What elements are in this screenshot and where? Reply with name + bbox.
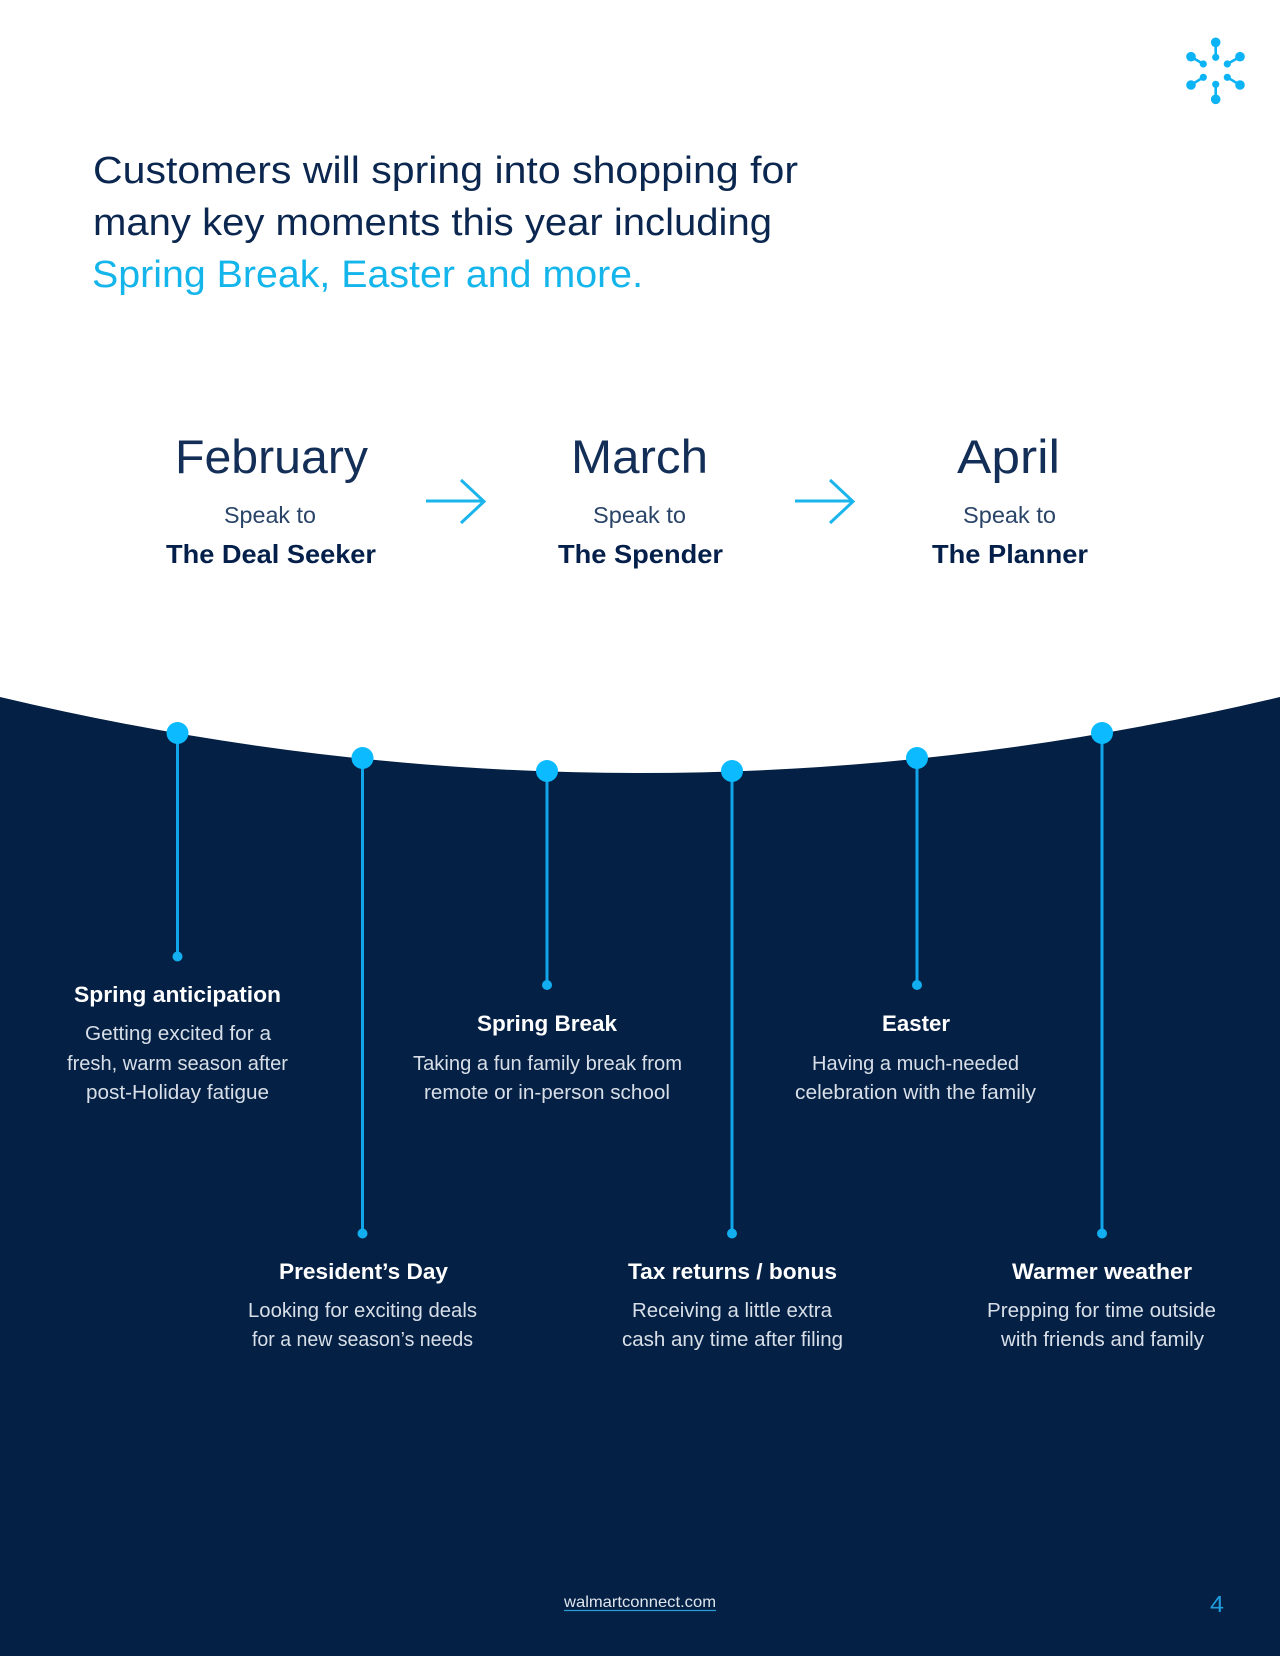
month: February: February — [175, 430, 369, 483]
timeline marker: Tax returns / bonus — [721, 760, 743, 1238]
timeline marker: Spring Break — [536, 760, 558, 990]
timeline marker: President's Day — [352, 747, 374, 1238]
text block: President's Day: President’s Day — [279, 1259, 449, 1284]
text block: Spring anticipation: post-Holiday fatigue — [86, 1082, 269, 1104]
month: March: March — [571, 430, 708, 483]
timeline marker: Warmer weather — [1091, 722, 1113, 1238]
icon: spark logo — [1186, 38, 1245, 104]
timeline marker: Spring anticipation — [166, 722, 188, 962]
arrow: February to March — [426, 480, 484, 523]
text block: Spring Break: remote or in-person school — [424, 1082, 670, 1104]
footer link: walmartconnect.com — [563, 1594, 716, 1611]
text block: Tax returns / bonus: Receiving a little extra — [632, 1300, 833, 1322]
text block: Easter: Having a much-needed — [812, 1053, 1019, 1075]
text block: President's Day: Looking for exciting deals — [248, 1300, 477, 1322]
title: many key moments this year including — [93, 202, 772, 244]
text block: Spring Break — [413, 1011, 682, 1104]
text block: Spring Break: Spring Break — [477, 1011, 618, 1036]
text block: Easter: Easter — [882, 1011, 950, 1036]
text block: Spring Break: Taking a fun family break from — [413, 1053, 682, 1075]
arrow: March to April — [795, 480, 853, 523]
title — [92, 150, 798, 296]
timeline marker: Easter — [906, 747, 928, 990]
text block: Tax returns / bonus — [622, 1259, 843, 1351]
month: April: Speak to — [963, 502, 1056, 528]
month: April: The Planner — [932, 539, 1088, 569]
panel: dark curved background — [0, 697, 1280, 1656]
text block: Tax returns / bonus: Tax returns / bonus — [628, 1259, 837, 1284]
text block: Warmer weather: with friends and family — [1000, 1329, 1204, 1351]
text block: Spring anticipation: Spring anticipation — [74, 982, 281, 1007]
text block: Warmer weather: Warmer weather — [1012, 1259, 1192, 1284]
title: Spring Break, Easter and more. — [92, 254, 643, 296]
text block: Easter — [795, 1011, 1036, 1104]
month: March: The Spender — [558, 539, 723, 569]
month: March: Speak to — [593, 502, 686, 528]
text block: President's Day — [248, 1259, 477, 1351]
month: April: April — [957, 430, 1060, 483]
text block: Tax returns / bonus: cash any time after filing — [622, 1329, 843, 1351]
month: March — [558, 430, 723, 569]
text block: Spring anticipation: Getting excited for a — [85, 1023, 272, 1045]
month: February: Speak to — [224, 502, 316, 528]
title: Customers will spring into shopping for — [93, 150, 798, 192]
text block: Spring anticipation — [67, 982, 288, 1104]
text block: Spring anticipation: fresh, warm season after — [67, 1053, 288, 1075]
text block: Warmer weather: Prepping for time outside — [987, 1300, 1216, 1322]
text block: President's Day: for a new season’s needs — [252, 1329, 473, 1351]
text block: Easter: celebration with the family — [795, 1082, 1036, 1104]
month: February — [166, 430, 376, 569]
month: April — [932, 430, 1088, 569]
page number: 4 — [1210, 1591, 1224, 1617]
month: February: The Deal Seeker — [166, 539, 376, 569]
text block: Warmer weather — [987, 1259, 1216, 1351]
